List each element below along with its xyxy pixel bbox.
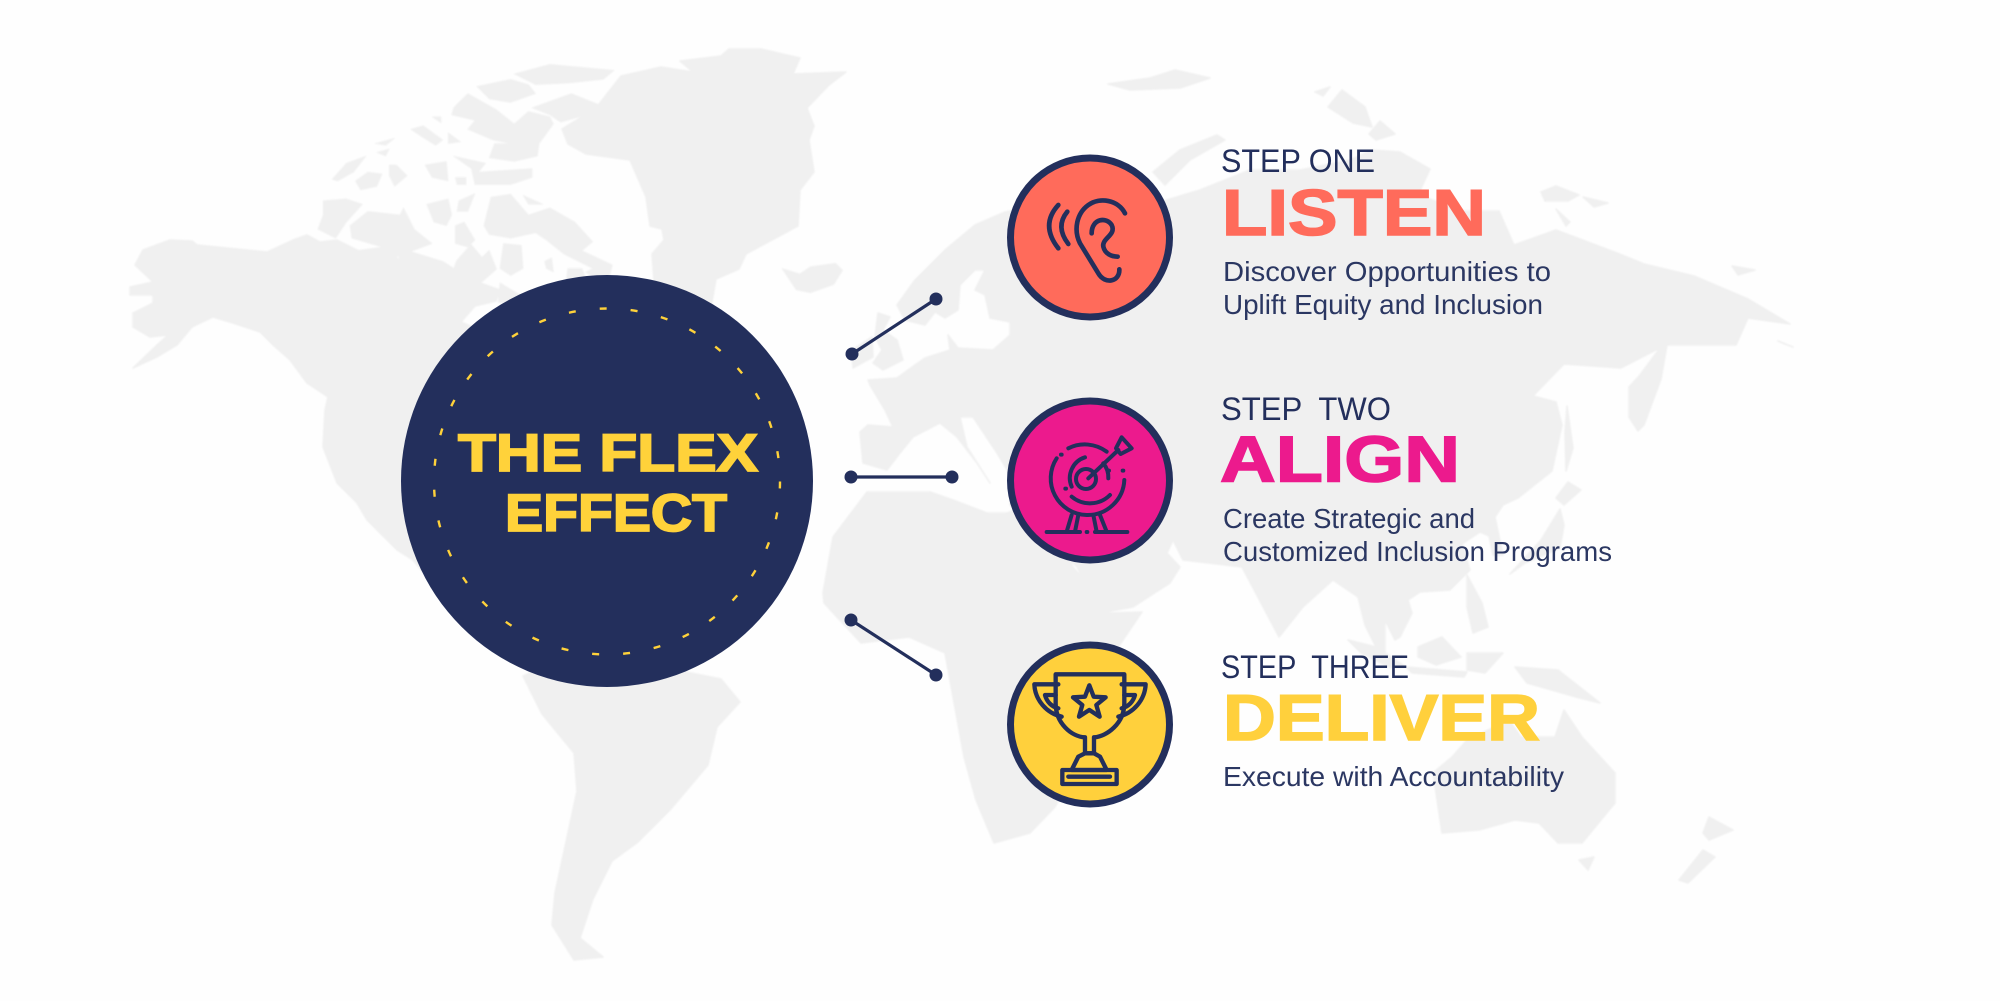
world map background [130, 49, 1793, 960]
step one text: STEP ONE [1221, 143, 1375, 179]
step three text [1221, 649, 1564, 792]
step two text: STEP TWO [1221, 391, 1391, 427]
heading: deliver: DELIVER [1223, 681, 1540, 754]
connector: to step one [846, 292, 942, 360]
icon: target in pink circle [1010, 401, 1170, 560]
heading: align: ALIGN [1220, 422, 1460, 496]
description: align: Create Strategic and [1223, 503, 1475, 534]
description: listen: Discover Opportunities to [1223, 256, 1551, 287]
circle title: EFFECT [505, 484, 727, 543]
dashed ring [434, 308, 780, 654]
circle title: THE FLEX [458, 424, 758, 483]
map: islands [852, 70, 1793, 883]
map: south america [523, 640, 740, 960]
description: listen: Uplift Equity and Inclusion [1223, 289, 1543, 320]
main circle: the flex effect [401, 275, 813, 687]
description: align: Customized Inclusion Programs [1223, 536, 1612, 567]
step one text [1221, 143, 1551, 320]
map: north america and arctic islands [130, 49, 846, 640]
heading: listen: LISTEN [1222, 176, 1486, 249]
connector: to step three [844, 614, 942, 682]
map: eurasia [860, 150, 1790, 665]
icon: ear in coral circle [1010, 158, 1170, 317]
step three text: STEP THREE [1221, 649, 1409, 685]
step two text [1220, 391, 1612, 567]
connector: to step two [844, 470, 958, 484]
description: deliver: Execute with Accountability [1223, 761, 1564, 792]
map: africa [823, 492, 1142, 843]
icon: trophy in yellow circle [1010, 645, 1170, 804]
